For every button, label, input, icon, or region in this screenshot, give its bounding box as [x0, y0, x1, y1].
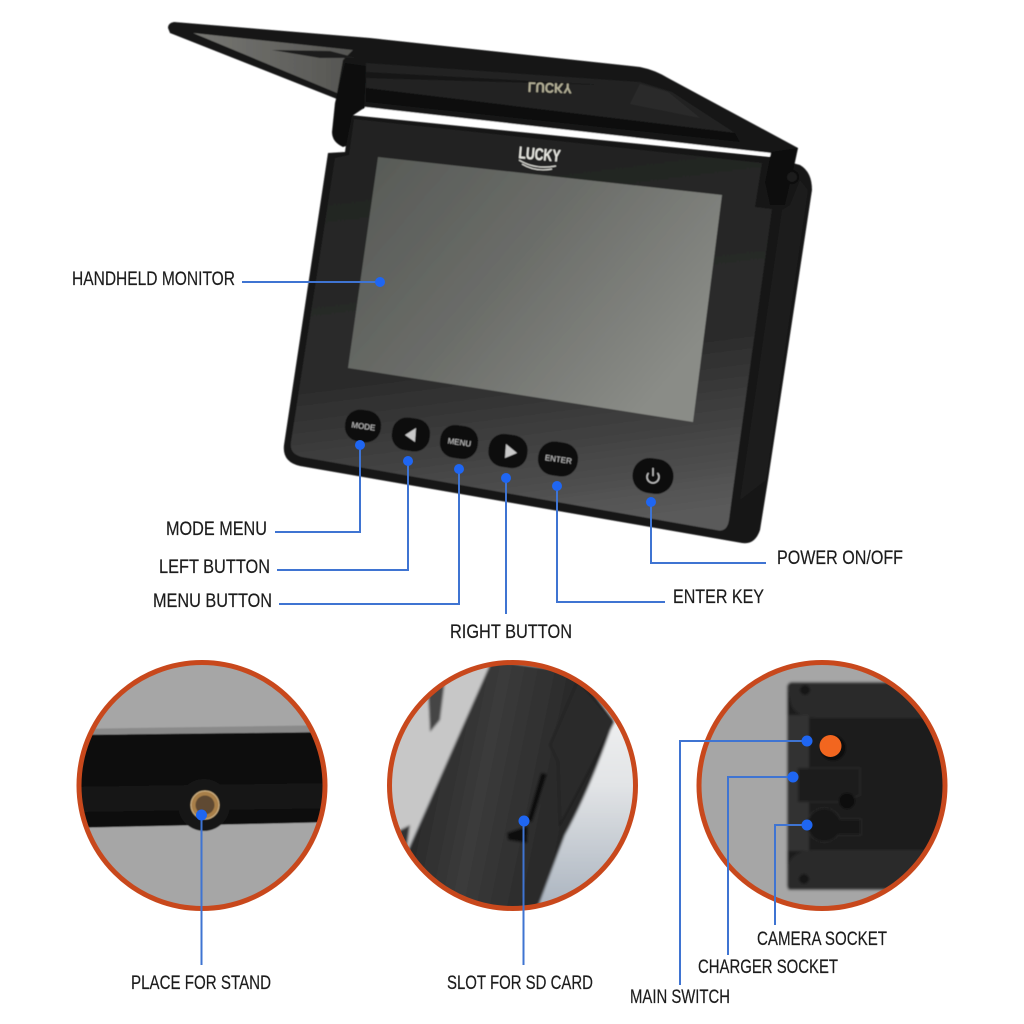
callout: enter key: ENTER KEY	[673, 587, 764, 608]
callout: enter key	[552, 481, 764, 608]
right hinge	[765, 148, 798, 205]
callout: handheld monitor	[72, 269, 385, 290]
callout: handheld monitor: HANDHELD MONITOR	[72, 269, 235, 290]
button: right arrow	[486, 432, 530, 470]
panel: place for stand detail	[76, 660, 328, 911]
callout: power on/off	[646, 497, 903, 569]
handheld monitor device	[168, 22, 812, 543]
panel: sd card slot detail	[385, 655, 645, 915]
callout: charger socket: CHARGER SOCKET	[698, 957, 838, 978]
callout: main switch	[630, 736, 812, 1008]
sd slot photo	[392, 665, 633, 906]
sockets photo	[702, 665, 942, 906]
callout: place for stand	[131, 810, 271, 994]
button: menu: MENU	[447, 436, 472, 449]
button: left arrow	[390, 416, 432, 453]
callout: camera socket	[757, 820, 887, 950]
screen	[348, 157, 722, 422]
main switch orange knob	[820, 735, 842, 757]
orange ring	[699, 662, 945, 908]
panel: sockets detail	[695, 655, 957, 915]
button: mode	[343, 408, 383, 444]
button: menu	[438, 423, 480, 461]
bezel	[291, 119, 772, 531]
callout: charger socket	[698, 772, 838, 978]
button: enter	[536, 439, 580, 479]
callout: left button	[159, 456, 413, 578]
brand logo: LUCKY	[518, 143, 562, 166]
orange ring	[390, 662, 636, 908]
callout: right button	[450, 473, 572, 643]
callout: right button: RIGHT BUTTON	[450, 622, 572, 643]
callout: main switch: MAIN SWITCH	[630, 987, 730, 1008]
callout: camera socket: CAMERA SOCKET	[757, 929, 887, 950]
callout: menu button	[153, 464, 464, 612]
white gap under lid	[365, 107, 771, 156]
callout: power on/off: POWER ON/OFF	[777, 548, 903, 569]
callout: left button: LEFT BUTTON	[159, 557, 270, 578]
right side highlight	[740, 180, 808, 500]
sun visor lid	[168, 22, 798, 158]
callout: menu button: MENU BUTTON	[153, 591, 272, 612]
button: mode: MODE	[351, 420, 376, 433]
callout: mode menu	[166, 440, 365, 540]
brand logo	[518, 143, 562, 170]
left hinge	[332, 63, 366, 147]
button: power	[630, 456, 676, 496]
callout: mode menu: MODE MENU	[166, 519, 267, 540]
monitor body outline	[284, 115, 812, 543]
stand photo	[82, 665, 322, 906]
callout: slot for sd card: SLOT FOR SD CARD	[447, 973, 593, 994]
callout: slot for sd card	[447, 816, 593, 994]
orange ring	[79, 662, 325, 908]
hinge screw	[786, 171, 798, 183]
lid reflection logo: LUCKY	[528, 79, 573, 97]
button: enter: ENTER	[544, 453, 573, 466]
callout: place for stand: PLACE FOR STAND	[131, 973, 271, 994]
